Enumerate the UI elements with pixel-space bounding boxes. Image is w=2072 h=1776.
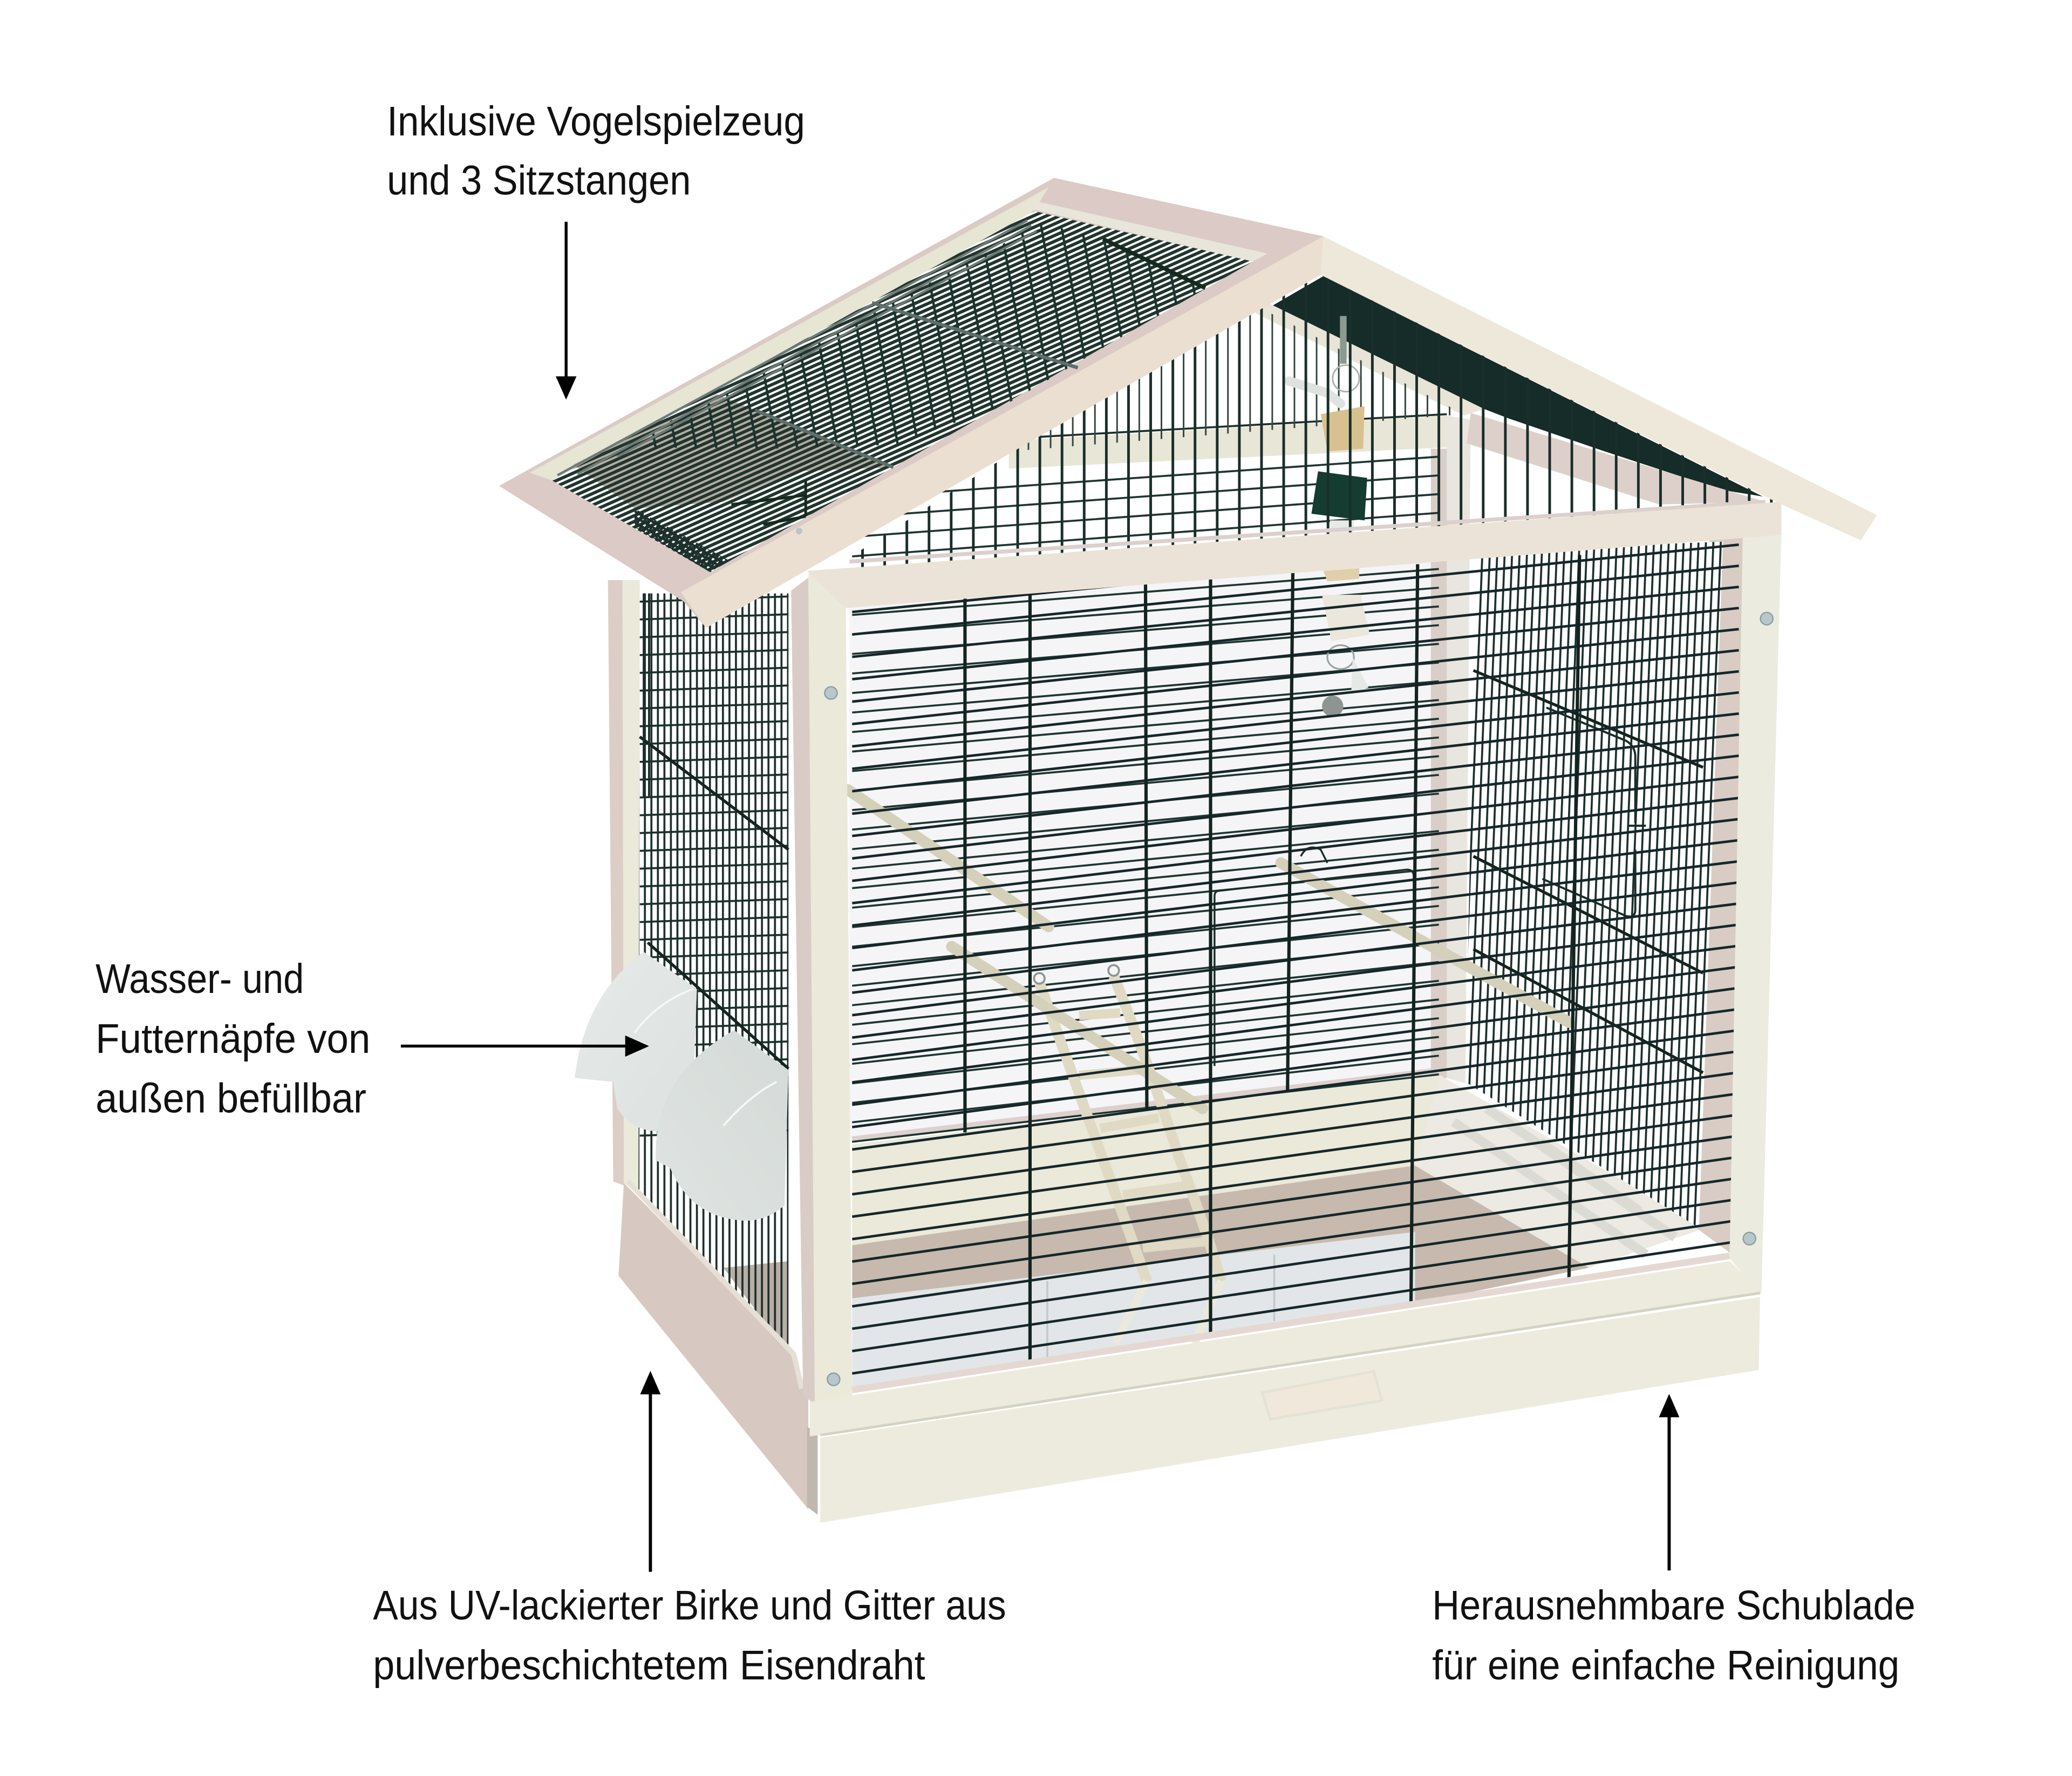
right door (1542, 707, 1646, 916)
front door outline (1215, 847, 1414, 1066)
label: materials (373, 1582, 1006, 1689)
brown tray (852, 1166, 1589, 1304)
bottom rail (810, 1256, 1761, 1437)
label: toys and perches: Inklusive Vogelspielzeug (387, 98, 805, 145)
label: materials: pulverbeschichtetem Eisendraht (373, 1642, 925, 1689)
label: cups: Futternäpfe von (96, 1016, 370, 1062)
front vertical wires (965, 555, 1579, 1363)
perch front (952, 947, 1203, 1108)
toy bell (1322, 696, 1343, 717)
back wall wires (852, 457, 1439, 1142)
ladder (1034, 965, 1221, 1344)
side base panel (618, 1181, 817, 1515)
roof screw (796, 528, 802, 534)
back rail (852, 1070, 1440, 1245)
dark roof underside (1273, 276, 1763, 496)
label: toys and perches (387, 98, 805, 203)
left side wall (608, 580, 817, 1515)
label: drawer (1432, 1582, 1916, 1689)
rear cup (575, 952, 697, 1131)
perches and ladder (848, 790, 1569, 1344)
right pink wall strip (1696, 535, 1749, 1255)
arrow: to base (640, 1371, 660, 1572)
pink gable strip (1467, 413, 1766, 505)
left roof board (681, 236, 1324, 628)
back corner post (1431, 416, 1471, 1083)
left front post (808, 574, 852, 1434)
perch right (1281, 863, 1569, 1022)
drawer (820, 1293, 1760, 1523)
front horizontal wires (852, 523, 1739, 1373)
lower toy piece (1322, 568, 1370, 641)
wooden block (1321, 406, 1365, 451)
side wire mesh (638, 594, 788, 1353)
upper dark roof wire (1103, 239, 1205, 288)
lower roof wires (731, 481, 806, 525)
green block (1311, 471, 1367, 520)
toy rings and white clip (1327, 645, 1368, 693)
white toy clip (1289, 365, 1359, 404)
arrow: to drawer (1659, 1394, 1679, 1570)
interior backdrop (849, 531, 1447, 1142)
roof wire mesh (552, 211, 1253, 572)
infographic canvas (96, 105, 1914, 1688)
label: toys and perches: und 3 Sitzstangen (387, 157, 691, 203)
right front post (1729, 535, 1781, 1294)
clear tray front (852, 1232, 1415, 1389)
front wire mesh (849, 252, 1785, 1373)
roof cream edge (530, 187, 1048, 481)
roof panel frame (499, 178, 1324, 628)
water and feed cups (575, 952, 788, 1221)
label: cups (96, 956, 370, 1121)
gable thin wires (1027, 314, 1450, 450)
ridge strip (1033, 200, 1267, 262)
roof (499, 178, 1877, 628)
right floor area (1415, 1076, 1706, 1268)
label: cups: Wasser- und (96, 956, 304, 1002)
right wall cross wires (1474, 670, 1703, 1073)
cage frame (791, 502, 1781, 1523)
label: drawer: für eine einfache Reinigung (1432, 1642, 1899, 1689)
rear corner post (608, 580, 640, 1194)
back wall crossbeam (1009, 414, 1447, 468)
toy chain (1342, 316, 1345, 364)
block spacer (1330, 520, 1354, 536)
bird cage illustration (499, 178, 1877, 1523)
perch left (848, 790, 1048, 927)
lintel (807, 502, 1781, 608)
dense lower mesh (635, 508, 729, 572)
arrow: to cups (401, 1036, 649, 1057)
label: drawer: Herausnehmbare Schublade (1432, 1582, 1916, 1629)
right roof board (1321, 236, 1877, 540)
label: cups: außen befüllbar (96, 1075, 366, 1121)
hanging toy (1289, 316, 1370, 717)
right wall wire mesh (1466, 542, 1723, 1228)
cage interior (849, 276, 1766, 1389)
roof cross wires (755, 303, 1078, 467)
front cup (656, 1030, 788, 1221)
left post pink edge (791, 577, 816, 1407)
screws (824, 613, 1773, 1385)
gable vertical wires (861, 277, 1773, 567)
arrow: to toys (556, 222, 576, 399)
drawer handle (1262, 1371, 1382, 1419)
cream roof strip (1256, 299, 1484, 416)
label: materials: Aus UV-lackierter Birke und Gitter aus (373, 1582, 1006, 1629)
